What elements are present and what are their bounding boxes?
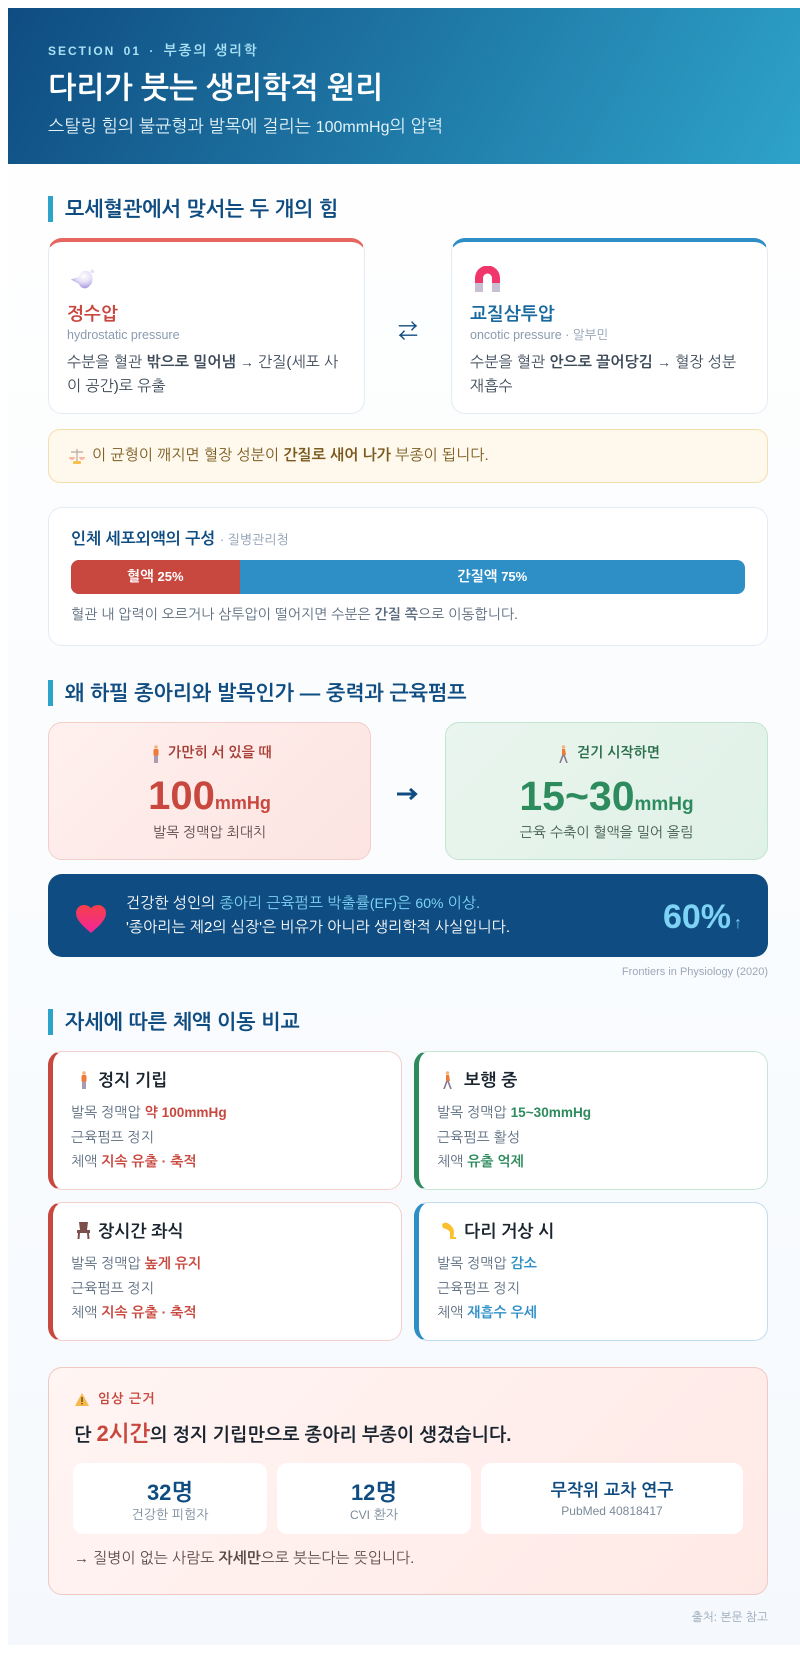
panel: body fluid composition: [48, 507, 768, 646]
row: pump: 근육펌프 정지: [71, 1129, 154, 1145]
segment: blood: 혈액 25%: [127, 569, 184, 585]
footer source: 출처: 본문 참고: [692, 1610, 768, 1624]
text: 건강한 성인의 종아리 근육펌프 박출률(EF)은 60% 이상.: [126, 895, 480, 912]
heading: gravity and muscle pump: [48, 680, 785, 706]
callout text: 이 균형이 깨지면 혈장 성분이 간질로 새어 나가 부종이 됩니다.: [92, 447, 489, 464]
row: pressure: 발목 정맥압 높게 유지: [71, 1255, 201, 1271]
english name: hydrostatic pressure: [67, 328, 180, 342]
panel: oncotic pressure: [451, 238, 768, 414]
description: [470, 354, 736, 394]
icon: walking person: [443, 1071, 452, 1089]
icon: magnet: [475, 266, 500, 292]
icon: dash cloud: [71, 270, 94, 288]
conclusion: → 질병이 없는 사람도 자세만으로 붓는다는 뜻입니다.: [74, 1550, 414, 1567]
row: pressure: 발목 정맥압 15~30mmHg: [437, 1104, 591, 1120]
row: fluid: 체액 지속 유출 · 축적: [71, 1304, 197, 1320]
panel: standing pressure: [48, 722, 371, 860]
callout: imbalance: [48, 429, 768, 483]
icon: walking person: [559, 745, 568, 763]
stacked bar chart: [71, 560, 745, 594]
icon: scales: [69, 449, 85, 464]
heading: gravity and muscle pump: 왜 하필 종아리와 발목인가 — 중력과 근육펌프: [65, 682, 467, 705]
name: 정수압: [67, 304, 118, 324]
panel: walking: [414, 1051, 768, 1190]
subtitle: 스탈링 힘의 불균형과 발목에 걸리는 100mmHg의 압력: [48, 116, 443, 136]
caption: CVI 환자: [350, 1507, 398, 1522]
panel: prolonged sitting: [48, 1202, 402, 1341]
details: [437, 1104, 591, 1169]
description: 수분을 혈관 밖으로 밀어냄 → 간질(세포 사: [67, 354, 338, 371]
panel: hydrostatic pressure: [48, 238, 365, 414]
row: pressure: 발목 정맥압 약 100mmHg: [71, 1104, 227, 1120]
row: pump: 근육펌프 정지: [71, 1280, 154, 1296]
section label: SECTION 01 · 부종의 생리학: [48, 43, 259, 58]
description: 재흡수: [470, 378, 513, 394]
card title: 정지 기립: [98, 1070, 167, 1090]
icon: warning: [75, 1393, 89, 1406]
chart note: 혈관 내 압력이 오르거나 삼투압이 떨어지면 수분은 간질 쪽으로 이동합니다.: [71, 606, 518, 622]
icon: standing person: [82, 1071, 86, 1089]
row: pump: 근육펌프 활성: [437, 1129, 520, 1145]
banner: calf muscle pump: [48, 874, 768, 957]
text: [126, 895, 510, 936]
label: 임상 근거: [98, 1391, 156, 1406]
details: [71, 1104, 227, 1169]
description: [67, 354, 338, 394]
arrow: standing to walking: [397, 788, 418, 800]
caption: 근육 수축이 혈액을 밀어 올림: [520, 824, 693, 840]
caption: 건강한 피험자: [132, 1507, 208, 1522]
main title: 다리가 붓는 생리학적 원리: [48, 72, 383, 105]
text: '종아리는 제2의 심장'은 비유가 아니라 생리학적 사실입니다.: [126, 918, 510, 936]
row: fluid: 체액 재흡수 우세: [437, 1304, 537, 1320]
caption: 발목 정맥압 최대치: [153, 824, 266, 840]
stat: healthy subjects: [73, 1463, 267, 1534]
card title: 보행 중: [464, 1070, 517, 1090]
description: 수분을 혈관 안으로 끌어당김 → 혈장 성분: [470, 354, 736, 371]
row: fluid: 체액 지속 유출 · 축적: [71, 1153, 197, 1169]
icon: chair: [77, 1222, 90, 1239]
details: [437, 1255, 537, 1320]
panel: leg elevation: [414, 1202, 768, 1341]
stat: study design: [481, 1463, 743, 1534]
number: 12명: [351, 1479, 397, 1505]
row: pump: 근육펌프 정지: [437, 1280, 520, 1296]
details: [71, 1255, 201, 1320]
header banner: [8, 8, 800, 164]
stat: 60%↑: [663, 898, 742, 936]
panel: walking pressure: [445, 722, 768, 860]
label: 가만히 서 있을 때: [168, 744, 272, 760]
icon: leg: [442, 1222, 456, 1239]
icon: heart: [76, 905, 106, 933]
description: 이 공간)로 유출: [67, 378, 166, 394]
english name: oncotic pressure · 알부민: [470, 328, 608, 342]
panel: clinical evidence: [48, 1367, 768, 1595]
value: 15~30mmHg: [519, 773, 694, 819]
design: 무작위 교차 연구: [551, 1480, 673, 1500]
pubmed id: PubMed 40818417: [561, 1504, 663, 1518]
name: 교질삼투압: [470, 304, 555, 324]
card title: 장시간 좌식: [98, 1221, 184, 1241]
segment: blood: [71, 560, 240, 594]
value: 100mmHg: [148, 774, 271, 818]
chart title: 인체 세포외액의 구성 · 질병관리청: [71, 531, 289, 548]
segment: interstitial fluid: 간질액 75%: [457, 569, 527, 585]
icon: standing person: [154, 745, 158, 763]
row: pressure: 발목 정맥압 감소: [437, 1255, 537, 1271]
headline: 단 2시간의 정지 기립만으로 종아리 부종이 생겼습니다.: [74, 1421, 511, 1446]
heading: two forces: [48, 196, 785, 222]
stat: CVI patients: [277, 1463, 471, 1534]
card title: 다리 거상 시: [464, 1221, 554, 1241]
arrow: exchange: ⇄: [398, 315, 418, 344]
label: 걷기 시작하면: [577, 744, 660, 760]
panel: standing still: [48, 1051, 402, 1190]
row: fluid: 체액 유출 억제: [437, 1153, 524, 1169]
heading: two forces: 모세혈관에서 맞서는 두 개의 힘: [65, 198, 338, 221]
heading: posture comparison: 자세에 따른 체액 이동 비교: [65, 1011, 300, 1034]
source note: Frontiers in Physiology (2020): [622, 966, 768, 978]
heading: posture comparison: [48, 1009, 785, 1035]
number: 32명: [147, 1479, 193, 1505]
